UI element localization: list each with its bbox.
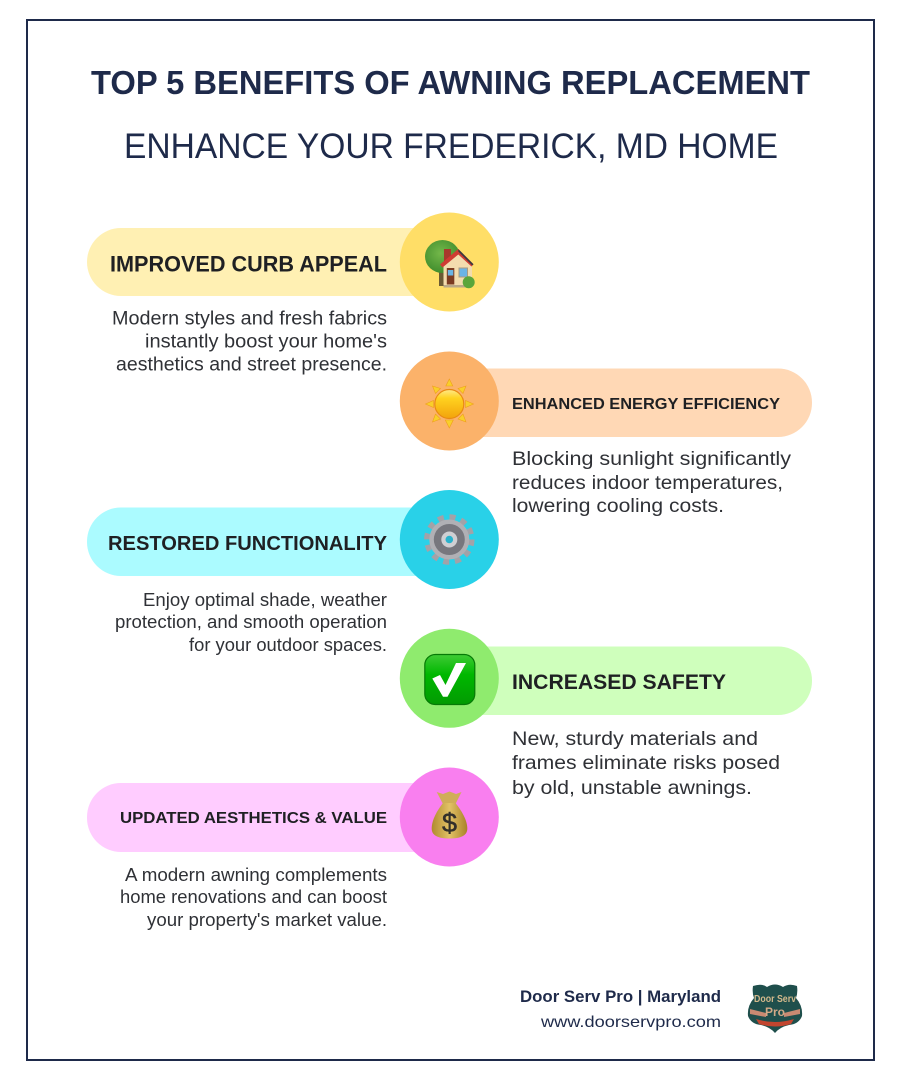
description: restored functionality — [115, 590, 387, 655]
panel: improved curb appeal — [87, 212, 499, 376]
logo: Pro — [765, 1005, 785, 1019]
panel: enhanced energy efficiency — [400, 352, 812, 517]
heading: restored functionality: RESTORED FUNCTIONALITY — [108, 533, 388, 555]
subtitle: ENHANCE YOUR FREDERICK, MD HOME — [124, 127, 778, 166]
description: improved curb appeal: instantly boost your home's — [145, 332, 387, 352]
description: restored functionality: Enjoy optimal shade, weather — [143, 590, 387, 610]
icon circle: cyan — [400, 490, 499, 589]
description: increased safety — [512, 728, 780, 799]
description: updated aesthetics — [120, 865, 387, 930]
heading pill: improved curb appeal — [87, 228, 449, 296]
description: increased safety: New, sturdy materials and — [512, 728, 758, 750]
icon: sun — [426, 379, 474, 428]
description: improved curb appeal: Modern styles and fresh fabrics — [112, 308, 387, 330]
heading: updated aesthetics: UPDATED AESTHETICS & VALUE — [120, 810, 387, 827]
icon: money bag: $ — [442, 808, 457, 838]
heading: increased safety: INCREASED SAFETY — [512, 670, 726, 694]
panel: restored functionality — [87, 490, 499, 655]
logo — [748, 984, 802, 1033]
icon circle: orange — [400, 352, 499, 450]
icon circle: green — [400, 629, 499, 728]
description: energy efficiency: reduces indoor temperatures, — [512, 472, 783, 494]
icon: money bag — [432, 792, 467, 838]
icon: gear — [428, 518, 471, 561]
panel: updated aesthetics and value — [87, 768, 499, 930]
description: energy efficiency — [512, 448, 791, 517]
heading pill: increased safety — [449, 646, 812, 715]
description: increased safety: by old, unstable awnings. — [512, 777, 752, 799]
heading: energy efficiency: ENHANCED ENERGY EFFICIENCY — [512, 396, 780, 413]
icon: house with tree — [425, 240, 475, 288]
heading pill: restored functionality — [87, 508, 449, 576]
panel: increased safety — [400, 629, 812, 799]
heading: improved curb appeal: IMPROVED CURB APPEAL — [110, 252, 387, 276]
heading pill: energy efficiency — [449, 368, 812, 437]
heading pill: updated aesthetics — [87, 783, 449, 852]
icon circle: pink — [400, 768, 499, 866]
icon: check mark — [425, 654, 475, 704]
icon circle: yellow — [400, 212, 499, 312]
footer website: www.doorservpro.com — [540, 1014, 721, 1031]
description: restored functionality: protection, and smooth operation — [115, 612, 387, 632]
description: improved curb appeal: aesthetics and street presence. — [116, 354, 387, 376]
description: energy efficiency: Blocking sunlight significantly — [512, 448, 791, 470]
description: improved curb appeal — [112, 308, 387, 376]
description: updated aesthetics: A modern awning complements — [125, 865, 387, 885]
description: updated aesthetics: home renovations and can boost — [120, 887, 387, 907]
description: updated aesthetics: your property's market value. — [147, 910, 387, 930]
description: increased safety: frames eliminate risks posed — [512, 752, 780, 774]
logo: Door Serv — [754, 994, 796, 1005]
footer company name: Door Serv Pro | Maryland — [520, 988, 721, 1006]
title: TOP 5 BENEFITS OF AWNING REPLACEMENT — [91, 64, 810, 101]
description: restored functionality: for your outdoor spaces. — [189, 635, 387, 655]
description: energy efficiency: lowering cooling costs. — [512, 495, 724, 517]
